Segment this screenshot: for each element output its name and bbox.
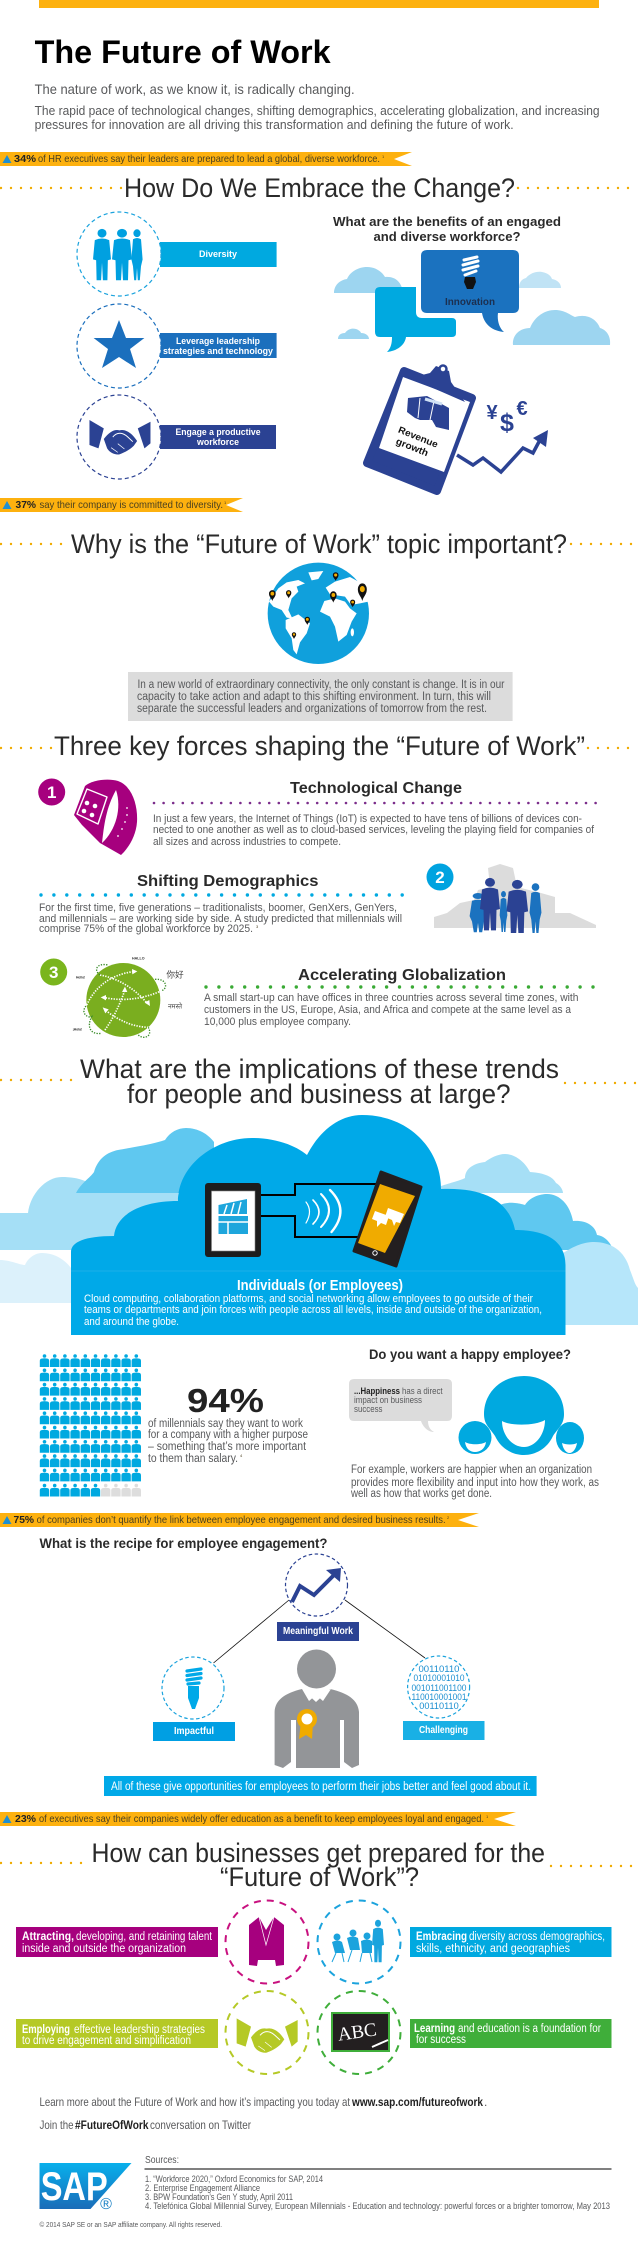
panel: accelerating globalization bbox=[40, 956, 596, 1037]
copyright: © 2014 SAP SE or an SAP affiliate company. All rights reserved. bbox=[40, 2221, 222, 2229]
panel: engage a productive workforce: Engage a productive bbox=[176, 427, 260, 438]
panel: accelerating globalization: 3 bbox=[49, 963, 58, 982]
heading: benefits: and diverse workforce? bbox=[374, 229, 521, 244]
bar: opportunities: All of these give opportunities for employees to perform their jobs better and feel good about it. bbox=[111, 1781, 531, 1793]
stat: 94% of millennials: 4 bbox=[240, 1453, 243, 1458]
heading: how do we embrace the change: How Do We Embrace the Change? bbox=[124, 173, 515, 203]
panel: accelerating globalization: 10,000 plus employee company. bbox=[204, 1016, 351, 1028]
callout: 23% of executives: 1 bbox=[486, 1814, 489, 1819]
speech bubble: happiness: ...Happiness bbox=[354, 1386, 400, 1396]
heading: recipe for employee engagement: What is the recipe for employee engagement? bbox=[40, 1536, 328, 1551]
panel: accelerating globalization: customers in the US, Europe, Asia, and Africa and compete at the same level as a bbox=[204, 1004, 572, 1016]
stat: 94% of millennials: of millennials say they want to work bbox=[148, 1418, 303, 1430]
stat: 94% of millennials: for a company with a higher purpose bbox=[148, 1429, 308, 1441]
panel: accelerating globalization: Hello! bbox=[76, 976, 85, 980]
panel: accelerating globalization: नमस्ते bbox=[168, 1002, 182, 1010]
item: meaningful work: Meaningful Work bbox=[283, 1625, 353, 1637]
sources bbox=[144, 2155, 612, 2211]
panel: diversity bbox=[77, 212, 277, 296]
text block: connectivity: In a new world of extraordinary connectivity, the only constant is change. It is in our bbox=[138, 679, 505, 691]
panel: attracting: Attracting, bbox=[22, 1931, 74, 1943]
intro text bbox=[35, 81, 600, 132]
stat: 94% of millennials: to them than salary. bbox=[148, 1453, 238, 1465]
callout: 23% of executives: of executives say their companies widely offer education as a benefit to keep employees loyal and engaged. bbox=[39, 1813, 484, 1825]
heading: do you want a happy employee: Do you want a happy employee? bbox=[369, 1346, 571, 1362]
panel: employing: Employing bbox=[22, 2024, 70, 2036]
illustration: revenue growth clipboard: € bbox=[516, 398, 528, 420]
item: challenging: 110010001001 bbox=[412, 1692, 466, 1702]
text block: learn more: . bbox=[484, 2095, 487, 2109]
callout: 37% committed to diversity: 37% bbox=[16, 499, 37, 511]
speech bubble: happiness: success bbox=[354, 1404, 383, 1414]
panel: diversity: Diversity bbox=[199, 249, 238, 260]
panel: accelerating globalization: A small start-up can have offices in three countries across several time zones, with bbox=[204, 992, 578, 1004]
heading: benefits bbox=[333, 214, 561, 244]
callout: 75% of companies: 2 bbox=[447, 1515, 450, 1520]
item: challenging: 001011001100 bbox=[412, 1683, 466, 1693]
heading: three key forces: Three key forces shaping the “Future of Work” bbox=[54, 731, 585, 761]
callout: 23% of executives: 23% bbox=[15, 1813, 37, 1825]
bar: opportunities bbox=[104, 1776, 537, 1796]
title: The Future of Work bbox=[35, 34, 331, 70]
callout: 34% of HR executives: 1 bbox=[382, 154, 385, 159]
intro text: The rapid pace of technological changes, shifting demographics, accelerating globalization, and increasing bbox=[35, 103, 600, 118]
panel: learning: ABC bbox=[336, 2019, 378, 2046]
panel: engage a productive workforce: workforce bbox=[196, 437, 239, 448]
callout: 37% committed to diversity: say their company is committed to diversity. bbox=[40, 499, 223, 511]
callout: 34% of HR executives: of HR executives say their leaders are prepared to lead a global, diverse workforce. bbox=[38, 153, 380, 165]
panel: shifting demographics: comprise 75% of the global workforce by 2025. bbox=[39, 923, 253, 935]
sources: 1. “Workforce 2020,” Oxford Economics for SAP, 2014 bbox=[145, 2174, 323, 2184]
item: impactful: Impactful bbox=[174, 1725, 214, 1737]
panel: learning: for success bbox=[416, 2034, 466, 2046]
panel: technological change: 1 bbox=[47, 783, 56, 802]
item: challenging: 00110110 bbox=[418, 1664, 460, 1674]
panel: shifting demographics: 3 bbox=[256, 924, 259, 929]
panel: shifting demographics: and millennials – are working side by side. A study predicted that millennials will bbox=[39, 913, 402, 925]
panel: employing bbox=[16, 1991, 308, 2074]
top bar bbox=[39, 0, 599, 8]
panel: embracing: Embracing bbox=[416, 1931, 467, 1943]
speech bubble: happiness: has a direct bbox=[402, 1386, 443, 1396]
callout: 75% of companies: of companies don’t quantify the link between employee engagement and desired business results. bbox=[37, 1514, 446, 1526]
panel: technological change bbox=[38, 778, 596, 855]
item: challenging: 01010001010 bbox=[414, 1673, 464, 1683]
illustration: globe with pins bbox=[268, 563, 369, 664]
panel: leverage leadership bbox=[77, 304, 277, 388]
panel: attracting bbox=[16, 1900, 308, 1984]
text block: happier workers: For example, workers are happier when an organization bbox=[351, 1464, 592, 1476]
item: meaningful work bbox=[277, 1554, 359, 1641]
panel: accelerating globalization: 你好 bbox=[166, 968, 184, 979]
heading: implications of these trends: What are the implications of these trends bbox=[80, 1054, 559, 1084]
heading: benefits: What are the benefits of an engaged bbox=[333, 214, 561, 229]
text block: happier workers bbox=[350, 1464, 599, 1500]
text block: connectivity: capacity to take action and adapt to this shifting environment. In turn, this will bbox=[137, 691, 491, 703]
text block: join the conversation: Join the bbox=[40, 2118, 74, 2132]
logo: SAP: ® bbox=[100, 2196, 112, 2213]
panel: engage a productive workforce bbox=[77, 395, 276, 479]
panel: employing: to drive engagement and simplification bbox=[22, 2035, 191, 2047]
panel: shifting demographics: 2 bbox=[435, 868, 445, 887]
panel: employing: effective leadership strategies bbox=[74, 2024, 205, 2036]
text block: join the conversation: #FutureOfWork bbox=[75, 2118, 149, 2132]
item: challenging: Challenging bbox=[419, 1724, 468, 1736]
panel: learning: and education is a foundation for bbox=[458, 2023, 601, 2035]
logo: SAP: SAP bbox=[41, 2165, 108, 2209]
intro text: pressures for innovation are all driving this transformation and defining the future of work. bbox=[35, 117, 514, 132]
diagram: recipe for engagement bbox=[104, 1554, 537, 1796]
panel: accelerating globalization: HALLO bbox=[132, 956, 145, 960]
heading: implications of these trends bbox=[80, 1054, 559, 1109]
panel: shifting demographics bbox=[39, 864, 596, 935]
sources: 3. BPW Foundation’s Gen Y study, April 2011 bbox=[145, 2192, 293, 2202]
text block: join the conversation bbox=[40, 2118, 251, 2132]
illustration: revenue growth clipboard: ¥ bbox=[486, 402, 498, 424]
sources: Sources: bbox=[145, 2155, 179, 2166]
illustration: clouds and innovation bubbles: Innovation bbox=[445, 297, 495, 308]
panel: accelerating globalization: Accelerating Globalization bbox=[298, 967, 506, 984]
illustration: clouds and innovation bubbles bbox=[334, 250, 610, 352]
illustration: cloud with devices bbox=[0, 1115, 638, 1335]
illustration: revenue growth clipboard: growth bbox=[394, 436, 430, 459]
panel: embracing: diversity across demographics, bbox=[469, 1931, 605, 1943]
heading: implications of these trends: for people and business at large? bbox=[127, 1079, 510, 1109]
heading: how can businesses get prepared bbox=[92, 1838, 545, 1892]
intro text: The nature of work, as we know it, is radically changing. bbox=[35, 81, 355, 97]
callout: 34% of HR executives: 34% bbox=[14, 153, 37, 165]
illustration: revenue growth clipboard: Revenue bbox=[396, 425, 439, 451]
panel: leverage leadership: Leverage leadership bbox=[176, 336, 260, 347]
panel: leverage leadership: strategies and technology bbox=[163, 346, 274, 357]
heading: why is future of work important: Why is the “Future of Work” topic important? bbox=[71, 529, 567, 559]
speech bubble: happiness bbox=[349, 1379, 452, 1432]
text block: connectivity bbox=[128, 672, 513, 721]
icon: employee with award ribbon bbox=[275, 1650, 359, 1768]
callout: 37% committed to diversity: 1 bbox=[224, 500, 227, 505]
panel: accelerating globalization: ¡Hola! bbox=[73, 1027, 82, 1031]
illustration: cloud with devices: and around the globe. bbox=[84, 1316, 179, 1328]
callout: 75% of companies: 75% bbox=[14, 1514, 35, 1526]
item: challenging: 00110110 bbox=[419, 1701, 459, 1711]
illustration: revenue growth clipboard bbox=[367, 366, 548, 491]
text block: happier workers: well as how that works get done. bbox=[350, 1488, 492, 1500]
illustration: cloud with devices: Individuals (or Employees) bbox=[237, 1278, 403, 1294]
panel: technological change: all sizes and across industries to compete. bbox=[153, 836, 341, 848]
panel: learning bbox=[318, 1991, 612, 2074]
stat: 94% of millennials: – something that’s more important bbox=[148, 1441, 307, 1453]
panel: attracting: developing, and retaining talent bbox=[76, 1931, 213, 1943]
panel: embracing bbox=[318, 1900, 612, 1984]
text block: connectivity: separate the successful leaders and organizations of tomorrow from the rest. bbox=[137, 703, 487, 715]
illustration: cloud with devices: Cloud computing, collaboration platforms, and social networking allow employees to go outside of their bbox=[84, 1293, 533, 1305]
text block: learn more: www.sap.com/futureofwork bbox=[351, 2095, 483, 2109]
heading: how can businesses get prepared: “Future of Work”? bbox=[220, 1862, 419, 1892]
text block: join the conversation: conversation on Twitter bbox=[150, 2118, 251, 2132]
panel: learning: Learning bbox=[414, 2023, 455, 2035]
icon: happy faces bbox=[458, 1376, 584, 1455]
item: impactful bbox=[153, 1657, 235, 1741]
stat: 94% of millennials: 94% bbox=[187, 1382, 264, 1419]
panel: technological change: nected to one another as well as to cloud-based services, leveling the playing field for companies of bbox=[153, 824, 595, 836]
text block: learn more: Learn more about the Future of Work and how it’s impacting you today at bbox=[40, 2095, 351, 2109]
icon grid: 94 of 100 people bbox=[40, 1354, 141, 1496]
illustration: cloud with devices: teams or departments and join forces with people across all levels, inside and outside of the organization, bbox=[84, 1304, 542, 1316]
panel: technological change: Technological Change bbox=[290, 780, 462, 797]
panel: embracing: skills, ethnicity, and geographies bbox=[416, 1943, 570, 1955]
item: challenging bbox=[403, 1656, 484, 1740]
stat: 94% of millennials bbox=[148, 1382, 308, 1465]
panel: shifting demographics: Shifting Demographics bbox=[137, 873, 318, 890]
speech bubble: happiness: impact on business bbox=[354, 1395, 422, 1405]
illustration: revenue growth clipboard: $ bbox=[500, 409, 514, 437]
panel: technological change: In just a few years, the Internet of Things (IoT) is expected to have tens of billions of devices con- bbox=[153, 813, 582, 825]
panel: shifting demographics: For the first time, five generations – traditionalists, boomer, GenXers, GenYers, bbox=[39, 902, 397, 914]
heading: how can businesses get prepared: How can businesses get prepared for the bbox=[92, 1838, 545, 1868]
sources: 2. Enterprise Engagement Alliance bbox=[145, 2183, 260, 2193]
text block: happier workers: provides more flexibility and input into how they work, as bbox=[351, 1477, 599, 1489]
panel: attracting: inside and outside the organization bbox=[22, 1943, 186, 1955]
